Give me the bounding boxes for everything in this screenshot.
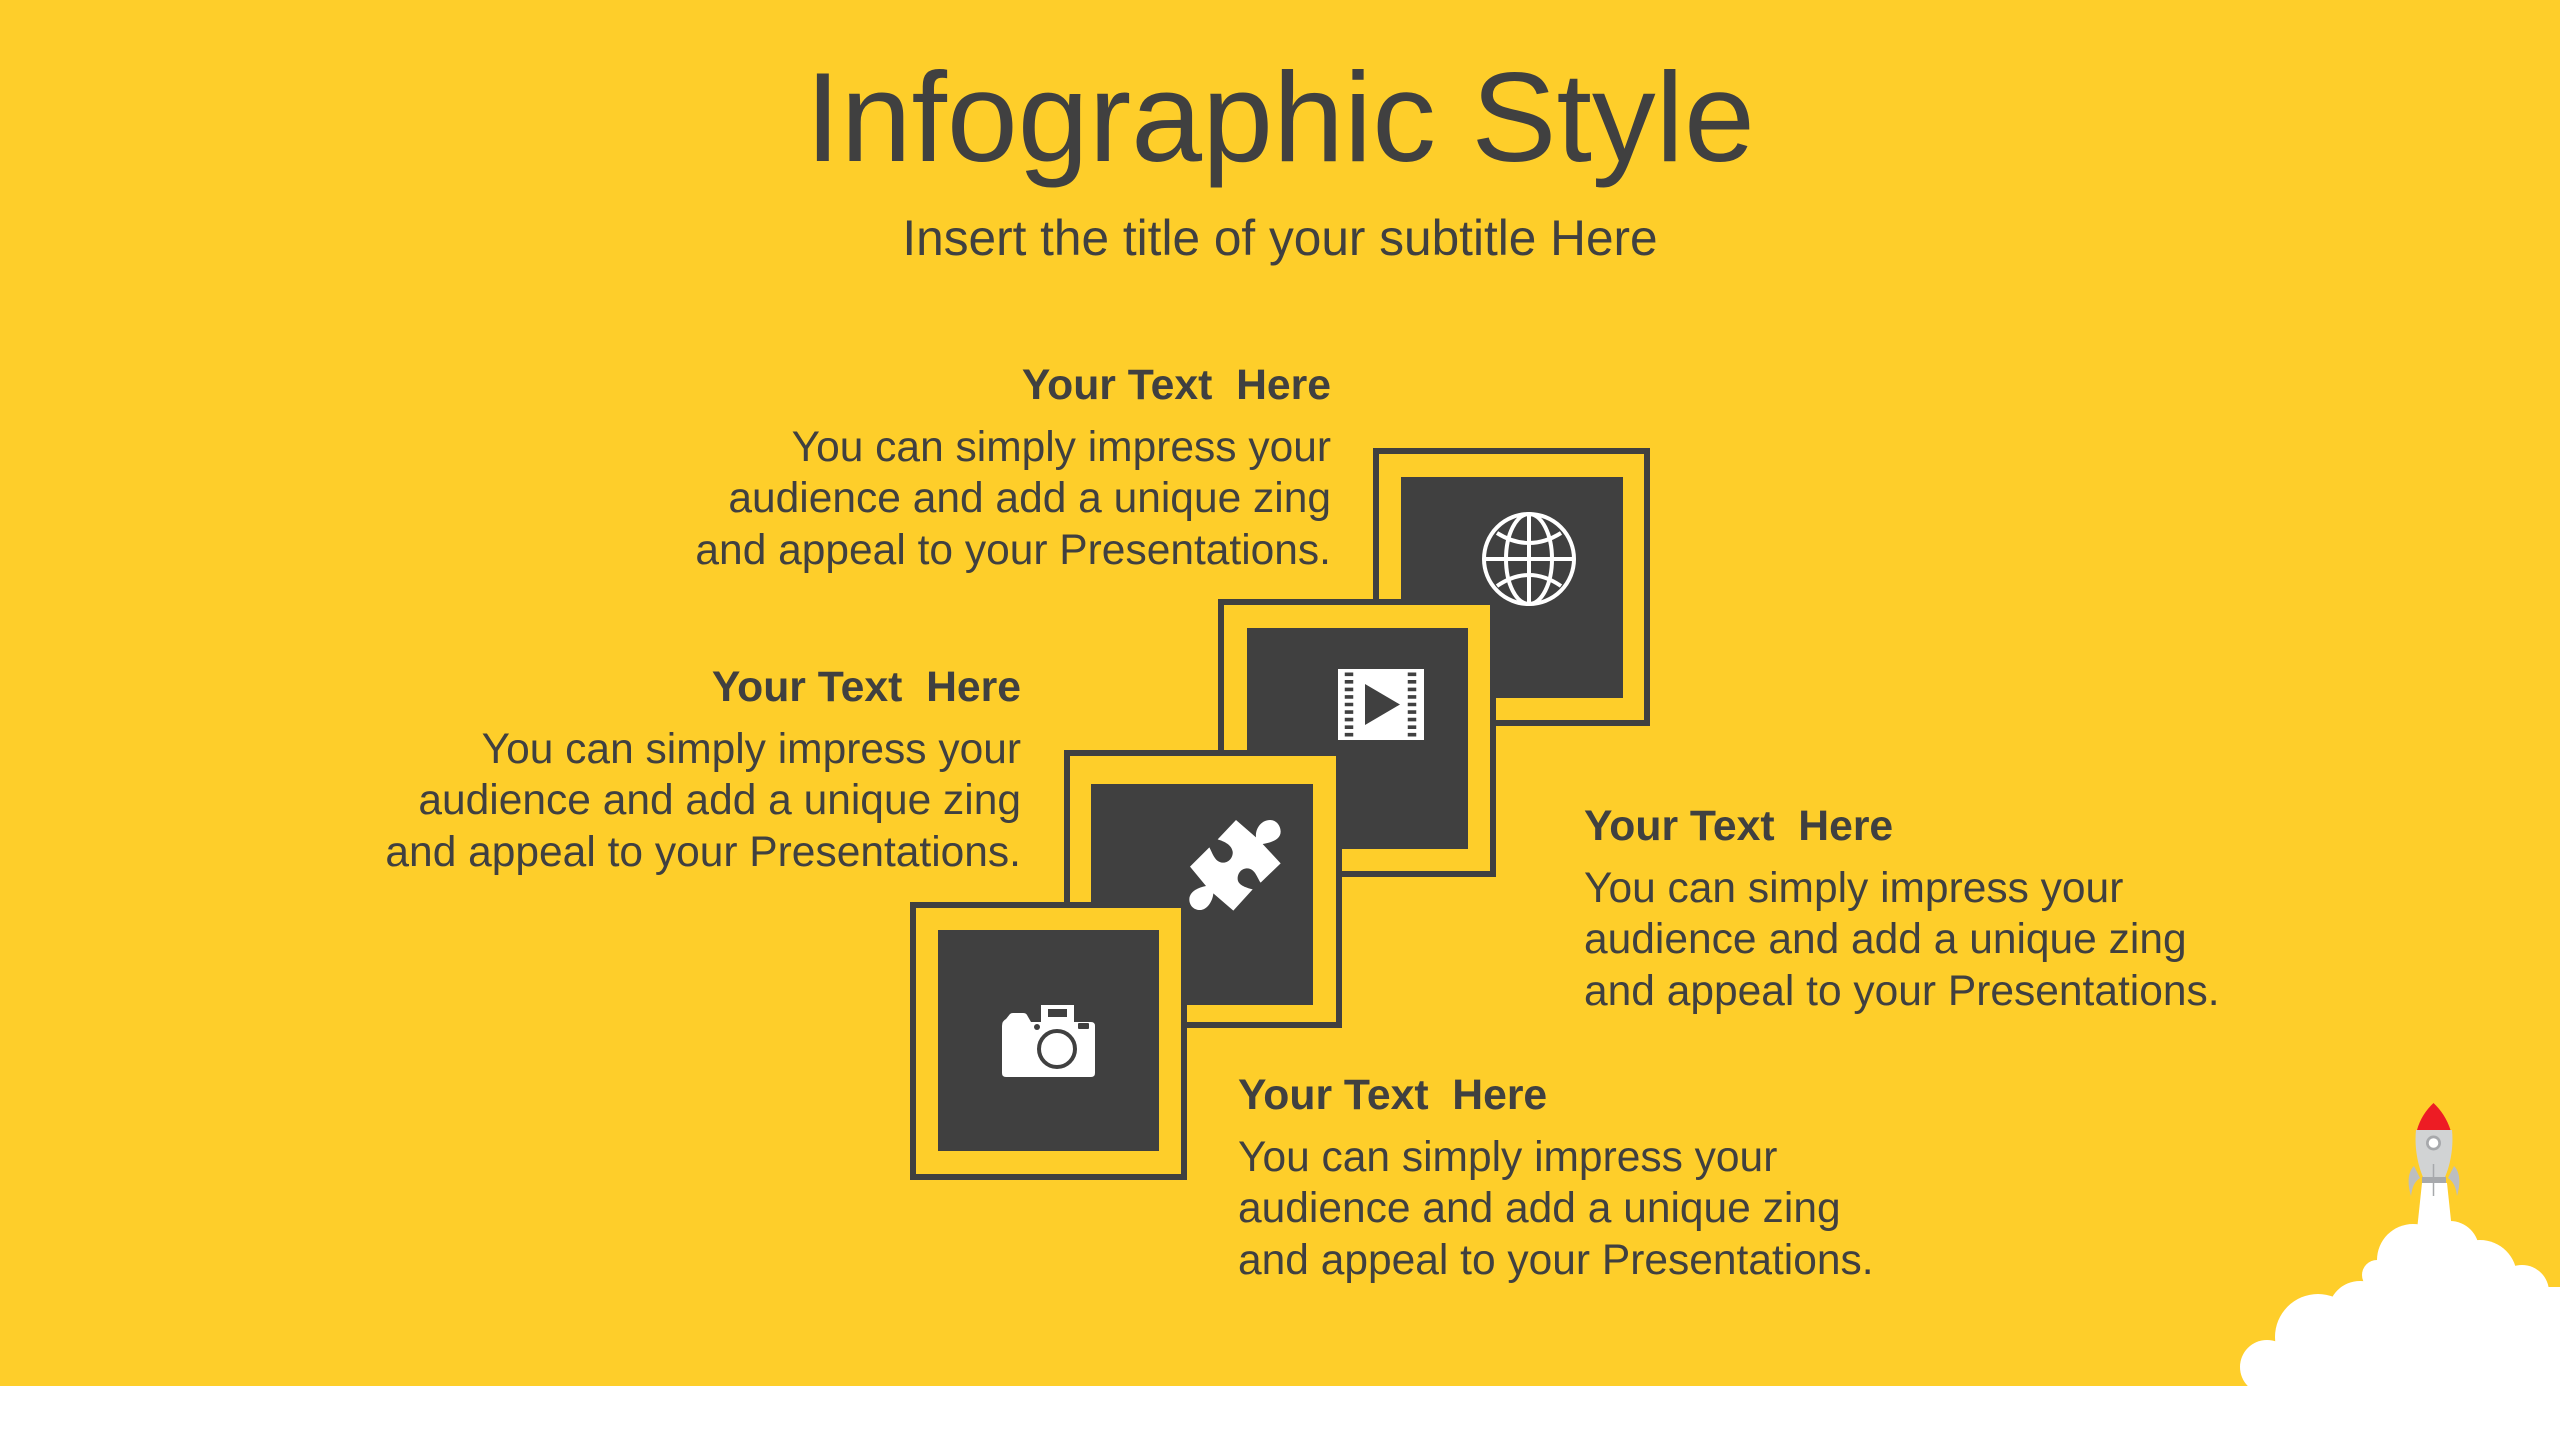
text block: bottom: You can simply impress your audience and add a unique zing and appeal to your Presentations. (1238, 1134, 1874, 1284)
panel: film square (1221, 602, 1493, 874)
text block: right: Your Text Here (1584, 802, 1893, 850)
text block: left: You can simply impress your audience and add a unique zing and appeal to your Presentations. (385, 726, 1021, 876)
panel: globe square (1376, 451, 1647, 723)
title: Infographic Style (805, 47, 1755, 189)
icon: rocket (2409, 1103, 2459, 1196)
icon: globe (1484, 514, 1574, 604)
text block: bottom: Your Text Here (1238, 1071, 1547, 1119)
icon: film strip with play button (1338, 669, 1424, 740)
text block: top: You can simply impress your audience and add a unique zing and appeal to your Presentations. (695, 424, 1331, 574)
panel: puzzle square (1067, 753, 1339, 1025)
panel: camera square (913, 905, 1184, 1177)
icon: puzzle piece (1189, 820, 1281, 911)
text block: right: You can simply impress your audience and add a unique zing and appeal to your Presentations. (1584, 865, 2220, 1015)
text block: top: Your Text Here (1022, 361, 1331, 409)
text block: left: Your Text Here (712, 663, 1021, 711)
icon: white smoke cloud (2240, 1183, 2560, 1440)
subtitle: Insert the title of your subtitle Here (902, 210, 1658, 266)
icon: camera (1002, 1005, 1095, 1077)
